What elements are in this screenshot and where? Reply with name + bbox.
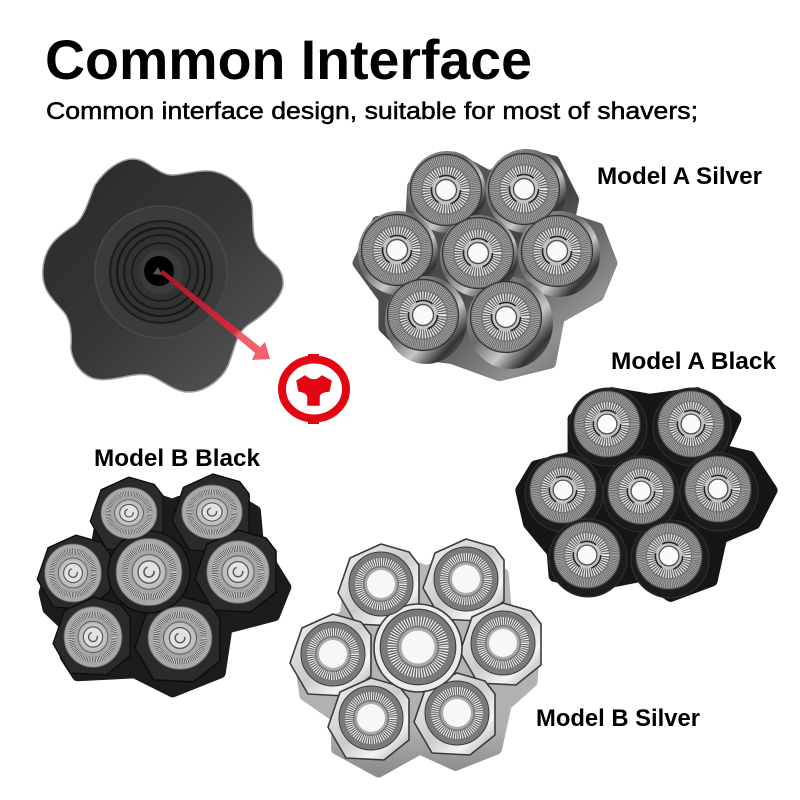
label: model A silver: Model A Silver [597,163,762,190]
knob body [43,159,283,392]
panel: rubber knob with connector [43,159,346,424]
base [300,554,535,772]
shaving blades [530,391,751,589]
icon: red connector socket [282,354,346,424]
arrow to connector [160,270,270,360]
base [358,155,612,375]
panel: model B black head [37,474,286,692]
knob concentric rings [95,206,227,338]
shaving blades [301,547,535,750]
subtitle: Common interface design, suitable for most of shavers; [46,98,698,125]
label: model B silver: Model B Silver [536,705,700,732]
label: model A black: Model A Black [611,348,777,375]
base [521,393,771,596]
base [44,492,286,692]
panel: model A silver head [358,149,612,375]
panel: model A black head [521,388,771,598]
panel: model B silver head [290,539,541,772]
shaving blades [362,154,592,352]
title: Common Interface [45,28,532,91]
label: model B black: Model B Black [94,445,261,472]
shaving blades [45,485,269,669]
